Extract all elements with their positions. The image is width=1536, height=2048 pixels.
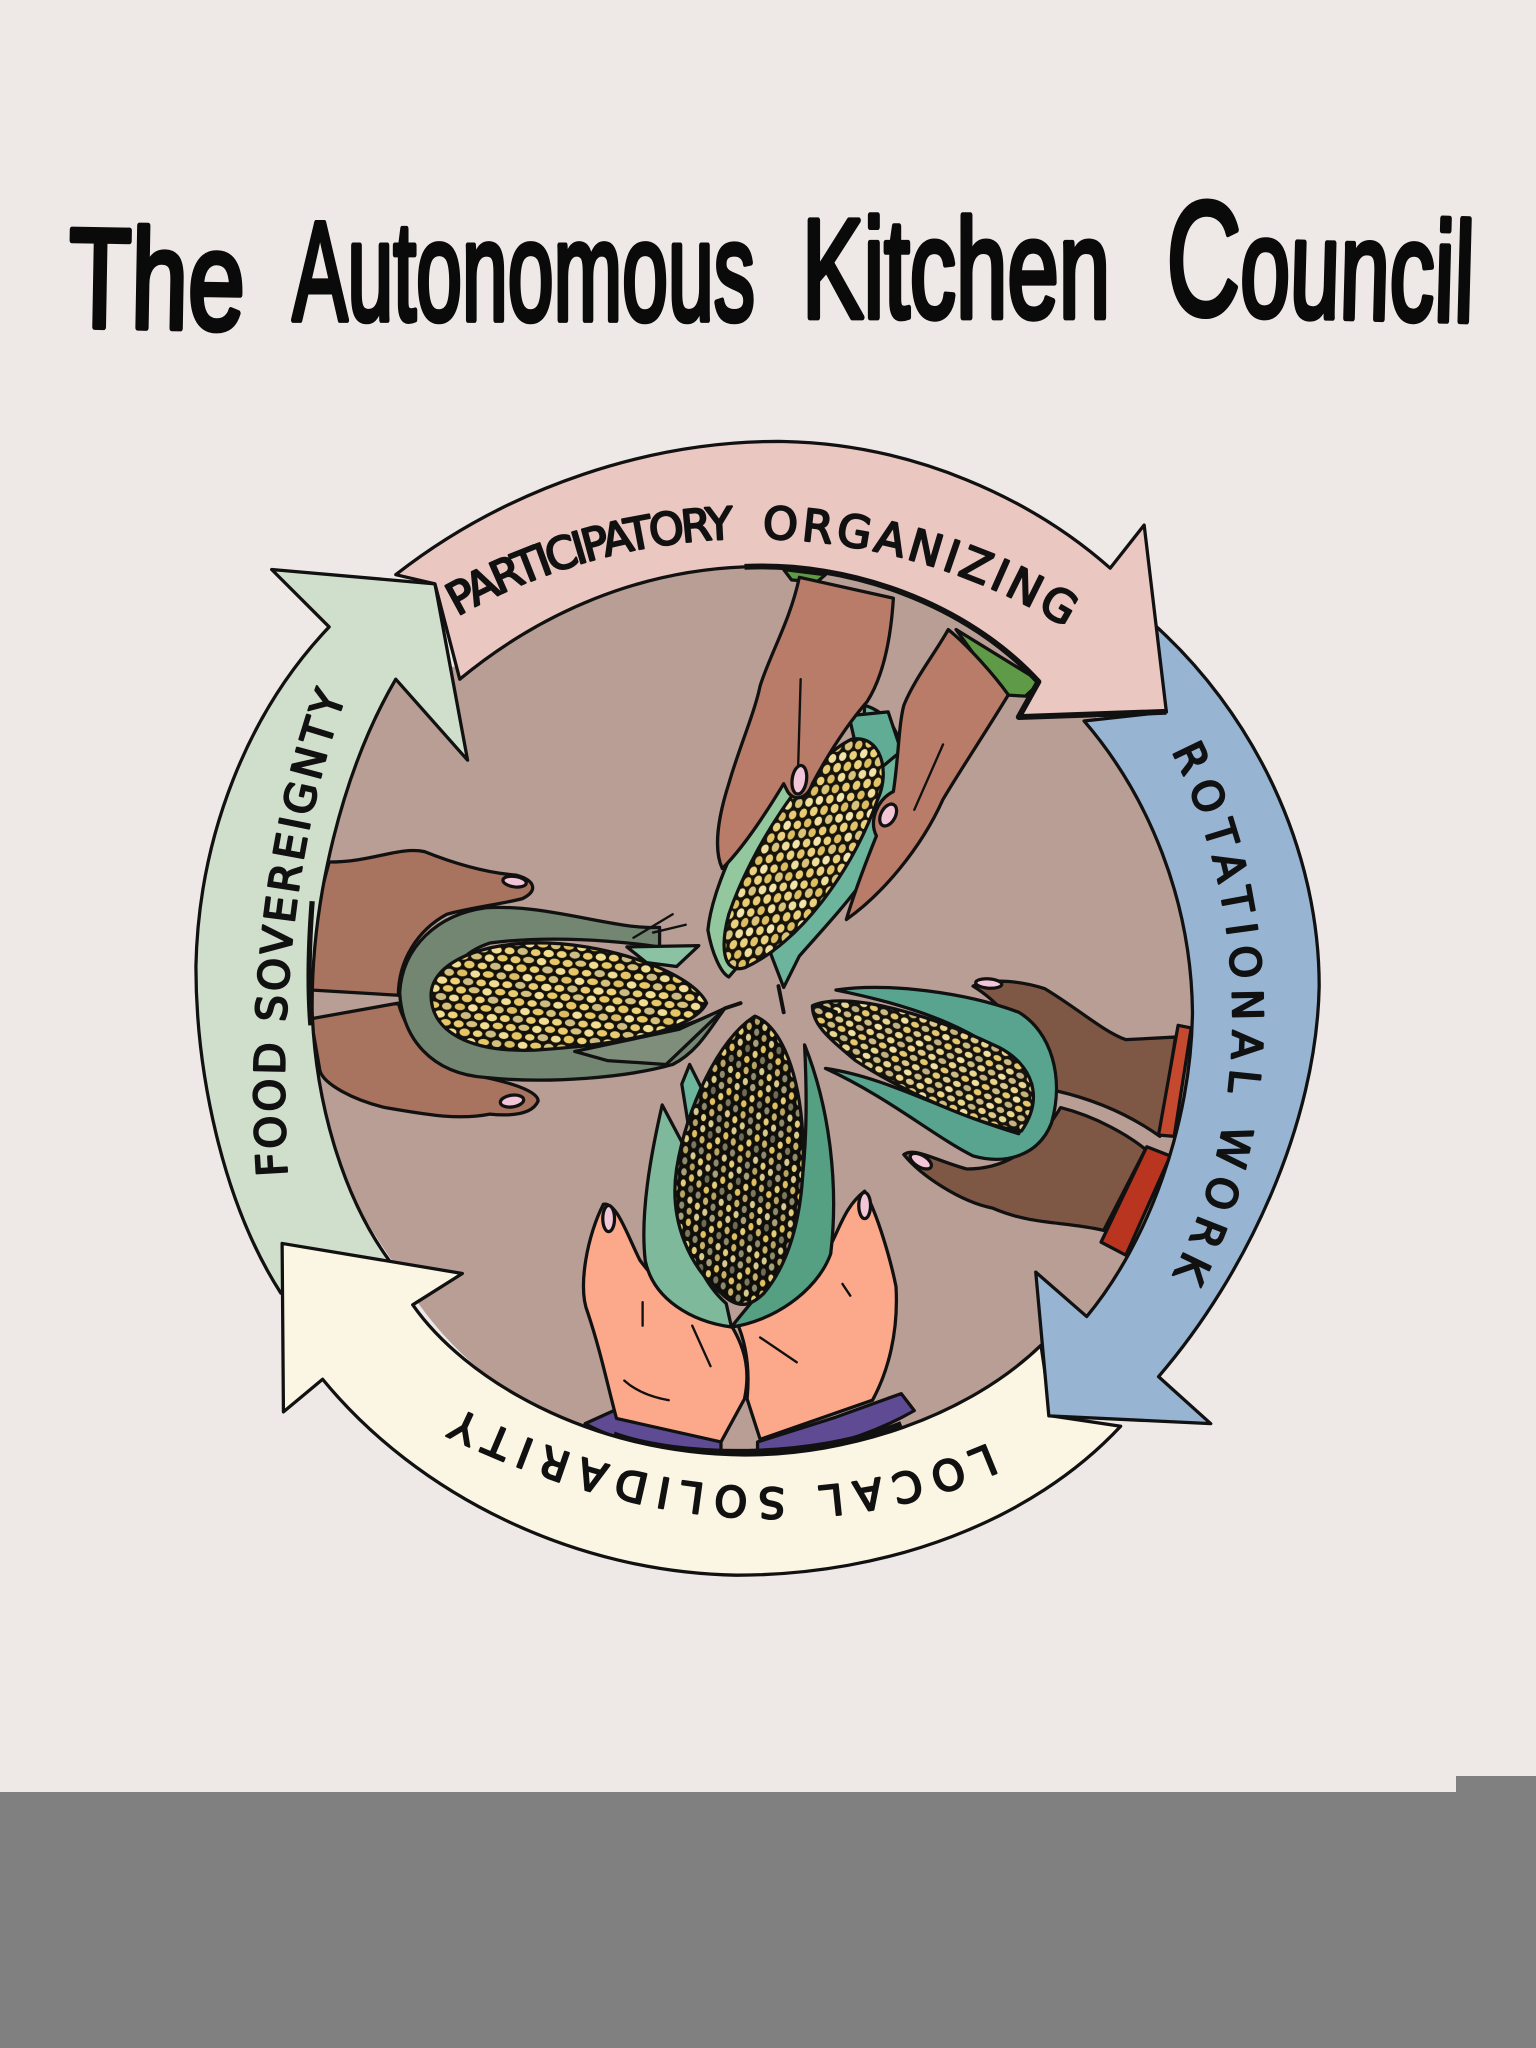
- right hand: top: [846, 630, 1008, 920]
- husk: top corn: [708, 705, 904, 987]
- husk: bottom corn: [644, 1045, 834, 1327]
- sleeve: top hands: [784, 569, 1041, 696]
- right hands: [904, 981, 1176, 1230]
- corn ear: left: [431, 943, 707, 1050]
- hands and corn: bottom: [584, 1016, 914, 1455]
- grey footer band: [0, 1776, 1536, 2048]
- corn ear: right: [812, 1001, 1033, 1131]
- title: Autonomous: [293, 192, 755, 350]
- nails: right: [908, 978, 1002, 1172]
- nails: bottom: [603, 1192, 871, 1232]
- label: participatory organizing: PARTICIPATORY: [444, 505, 733, 616]
- diagram and title artwork: [67, 168, 1477, 1577]
- hands and corn: left: [311, 851, 725, 1117]
- husk: left corn: [400, 907, 725, 1080]
- hands and corn: top: [708, 569, 1041, 987]
- left hands: [311, 851, 538, 1117]
- arrow: participatory organizing: [394, 440, 1168, 720]
- arrow: rotational work: [1034, 626, 1321, 1426]
- label: food sovereignty: FOOD SOVEREIGNTY: [252, 685, 343, 1174]
- sleeves: bottom: [585, 1394, 914, 1455]
- title: Kitchen: [802, 189, 1110, 347]
- label: rotational work: ROTATIONAL WORK: [1172, 740, 1264, 1288]
- arrow: food sovereignty: [194, 568, 470, 1295]
- left hand: top: [718, 577, 893, 869]
- nails: left: [500, 875, 527, 1109]
- arrow: local solidarity: [280, 1242, 1122, 1577]
- corn ear: bottom: [675, 1016, 803, 1304]
- red cuffs: [1101, 1025, 1191, 1255]
- corn ear: top: [724, 739, 883, 969]
- label: participatory organizing: ORGANIZING: [764, 505, 1078, 624]
- creases: bottom hands: [624, 1284, 850, 1400]
- title: [67, 168, 1477, 360]
- label: participatory organizing: [444, 505, 1078, 624]
- hands and corn: right: [812, 978, 1191, 1255]
- nails: top: [790, 765, 900, 829]
- label: local solidarity: LOCAL SOLIDARITY: [445, 1412, 998, 1520]
- tip strokes at centre: [725, 986, 836, 1012]
- central circle: [304, 562, 1206, 1463]
- title: The: [67, 199, 246, 360]
- palms: bottom: [584, 1191, 896, 1442]
- husk: right corn: [825, 987, 1056, 1159]
